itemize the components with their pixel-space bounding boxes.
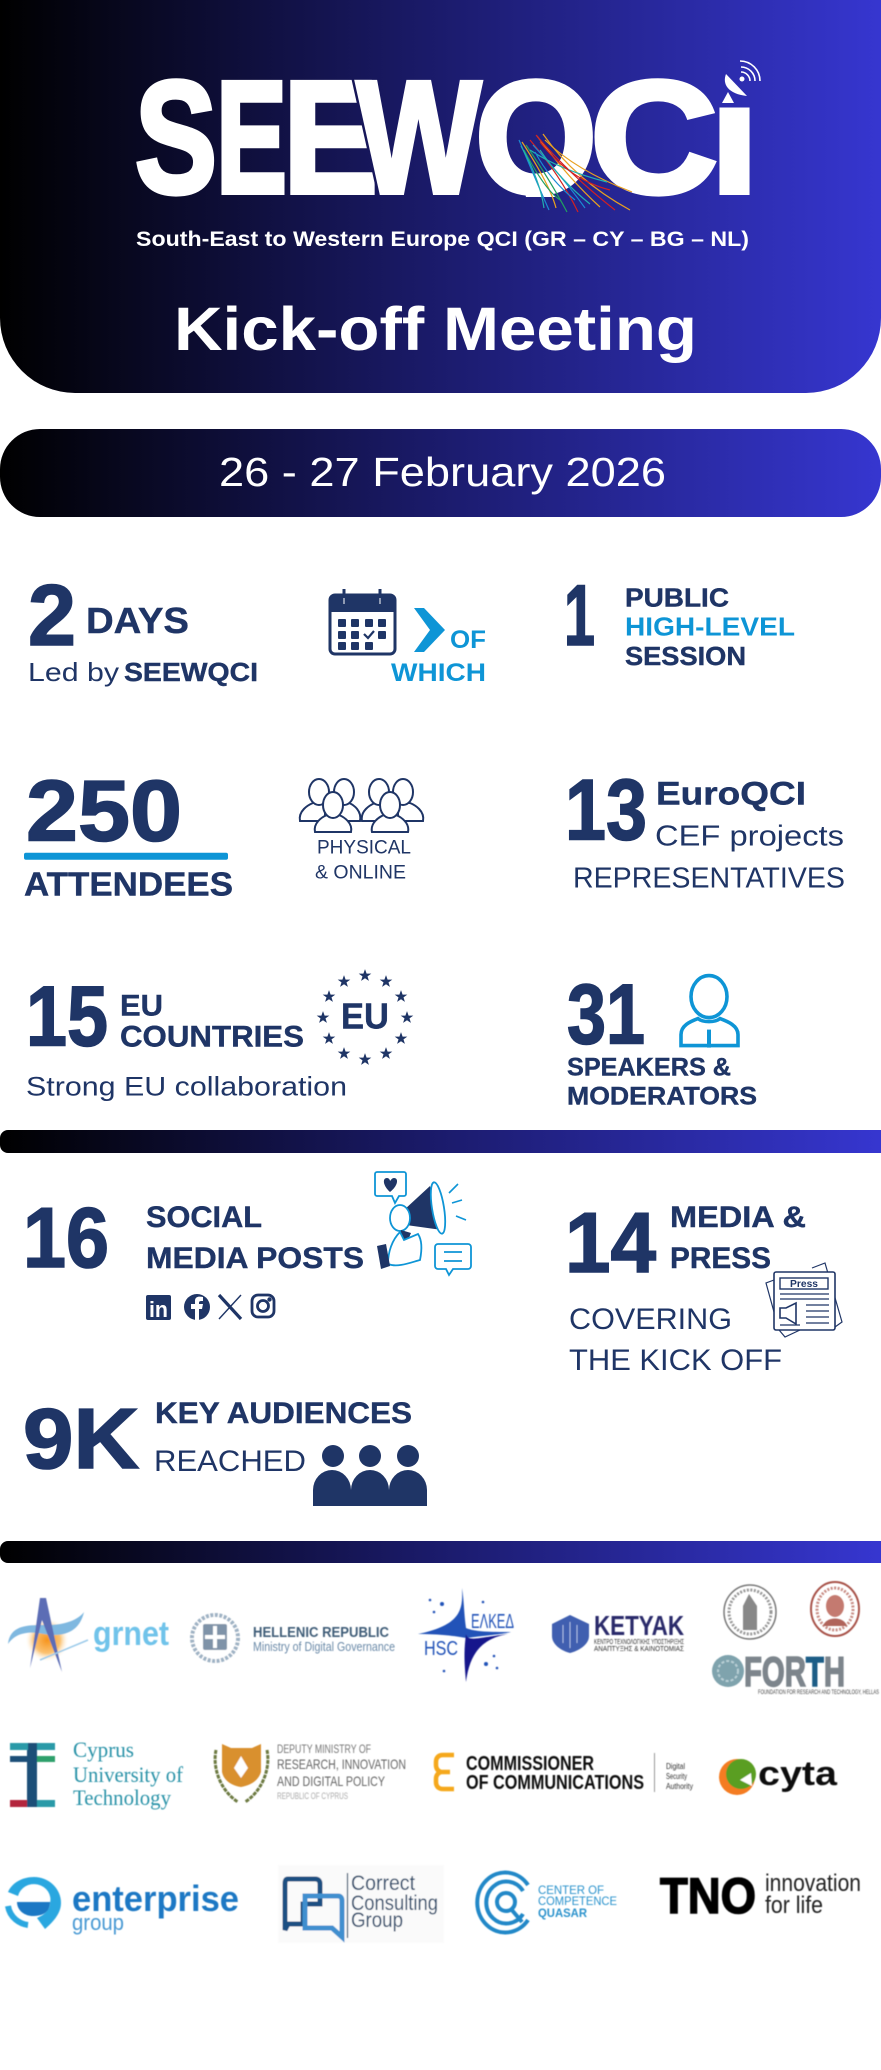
logo: Hellenic Republic: Ministry of Digital Governance <box>253 1639 395 1654</box>
logo: TNO: for life <box>765 1892 823 1919</box>
icon: press newspaper: Press <box>790 1279 818 1290</box>
logo: TNO <box>660 1868 861 1924</box>
icon: linkedin: in <box>149 1297 168 1322</box>
icon: calendar <box>330 589 395 654</box>
logo: enterprise group: group <box>72 1910 124 1935</box>
logo: Hellenic Republic <box>192 1615 395 1661</box>
logo: Cyprus University of Technology <box>10 1737 184 1810</box>
SEEWQCI logo: I <box>712 84 757 218</box>
stat: 15 EU countries: Strong EU collaboration <box>26 1072 347 1102</box>
stat: 2 days: 2 <box>28 568 76 664</box>
icon: speaker <box>681 976 738 1048</box>
logo: Deputy Ministry Cyprus: REPUBLIC OF CYPRUS <box>277 1791 348 1801</box>
logo: Cyprus University of Technology: University of <box>73 1762 184 1787</box>
logo: Cyprus University of Technology: Technology <box>73 1785 171 1810</box>
label: of which <box>391 626 486 687</box>
stat: 16 social media posts: SOCIAL <box>146 1201 262 1234</box>
stat: 1 public session: 1 <box>564 568 595 664</box>
logo: grnet: grnet <box>93 1615 169 1653</box>
stat: 13 EuroQCI: REPRESENTATIVES <box>573 863 845 895</box>
logo: Commissioner of Communications: Authority <box>666 1782 693 1791</box>
stat: 1 public session: PUBLIC <box>625 582 729 612</box>
stat: 31 speakers: 31 <box>567 968 645 1062</box>
icon: group of people <box>300 779 423 832</box>
logo: ELKED HSC: ΕΛΚΕΔ <box>471 1611 514 1633</box>
stat: 14 media and press: THE KICK OFF <box>569 1344 782 1377</box>
logo: Quasar <box>477 1872 617 1933</box>
stat: 14 media and press: PRESS <box>670 1242 771 1275</box>
date banner: 26 - 27 February 2026 <box>219 449 666 495</box>
title: Kick-off Meeting <box>174 295 697 363</box>
label: physical and online: PHYSICAL <box>317 838 411 858</box>
stat: 250 attendees <box>24 764 233 903</box>
icon: solid audience <box>313 1445 427 1506</box>
icon: megaphone with hand <box>375 1172 471 1275</box>
logo: Commissioner of Communications: OF COMMUNICATIONS <box>466 1772 644 1794</box>
logo: ELKED HSC: HSC <box>424 1638 458 1660</box>
stat: 31 speakers: MODERATORS <box>567 1082 757 1110</box>
icon: EU stars <box>317 969 413 1065</box>
stat: 9K key audiences: KEY AUDIENCES <box>155 1397 412 1430</box>
logo: Cyprus University of Technology: Cyprus <box>73 1737 134 1762</box>
label: of which: OF <box>450 626 486 654</box>
stat: 16 social media posts: MEDIA POSTS <box>146 1242 364 1275</box>
icon: instagram <box>252 1295 274 1317</box>
logo: enterprise group <box>8 1877 239 1935</box>
stat: 1 public session: HIGH-LEVEL <box>625 612 795 642</box>
logo: Deputy Ministry Cyprus: AND DIGITAL POLICY <box>277 1773 385 1789</box>
logo: university seal grey <box>724 1585 776 1639</box>
logo: enterprise group: enterprise <box>72 1878 239 1919</box>
label: physical and online <box>315 838 411 884</box>
date banner <box>0 429 881 517</box>
logo: Correct Consulting Group: Consulting <box>351 1892 438 1915</box>
stat: 15 EU countries: COUNTRIES <box>120 1020 304 1054</box>
logo: Correct Consulting Group <box>278 1865 444 1943</box>
SEEWQCI logo: Q <box>475 48 597 226</box>
stat: 14 media and press: MEDIA & <box>670 1201 806 1234</box>
logo: Correct Consulting Group: Group <box>351 1909 403 1932</box>
logo: Quasar: QUASAR <box>538 1906 587 1920</box>
stat: 15 EU countries <box>26 970 347 1102</box>
stat: 250 attendees: ATTENDEES <box>24 866 233 903</box>
stat: 2 days: Led by <box>28 657 119 687</box>
stat: 15 EU countries: EU <box>120 990 163 1022</box>
stat: 31 speakers: SPEAKERS & <box>567 1054 731 1082</box>
logo: cyta <box>719 1755 838 1795</box>
logo: ELKED HSC <box>418 1588 514 1682</box>
stat: 2 days <box>28 568 258 687</box>
logo: KETYAK: ΑΝΑΠΤΥΞΗΣ & ΚΑΙΝΟΤΟΜΙΑΣ <box>594 1646 685 1653</box>
icons: social networks <box>146 1294 274 1322</box>
logo: Commissioner of Communications: Digital <box>666 1762 685 1771</box>
logo: KETYAK: KETYAK <box>594 1610 684 1641</box>
stat: 1 public session: SESSION <box>625 641 746 671</box>
logo: Deputy Ministry Cyprus <box>215 1742 406 1802</box>
logo: grnet <box>8 1598 169 1672</box>
stat: 2 days: DAYS <box>86 600 189 641</box>
stat: 250 attendees: 250 <box>26 764 182 860</box>
logo: KETYAK <box>552 1610 685 1653</box>
logo: Deputy Ministry Cyprus: DEPUTY MINISTRY OF <box>277 1742 371 1756</box>
stat: 14 media and press: 14 <box>565 1196 656 1291</box>
stat: 14 media and press <box>565 1196 806 1377</box>
stat: 13 EuroQCI: CEF projects <box>655 821 844 853</box>
logo: TNO: innovation <box>765 1870 861 1897</box>
logo: Commissioner of Communications: COMMISSIONER <box>466 1753 594 1775</box>
SEEWQCI logo: E <box>216 48 287 226</box>
logo: university seal red <box>811 1582 859 1636</box>
SEEWQCI logo: C <box>590 48 718 226</box>
logo tagline: South-East to Western Europe QCI (GR – CY – BG – NL) <box>136 228 749 251</box>
stat: 2 days: SEEWQCI <box>124 657 258 687</box>
logo: Deputy Ministry Cyprus: RESEARCH, INNOVATION <box>277 1756 406 1772</box>
logo: Quasar: CENTER OF <box>538 1883 604 1897</box>
SEEWQCI logo <box>135 48 760 233</box>
stat: 13 EuroQCI: 13 <box>565 763 647 859</box>
logo: Commissioner of Communications <box>436 1753 693 1794</box>
logo: Hellenic Republic: HELLENIC REPUBLIC <box>253 1625 389 1641</box>
icon: X <box>219 1295 241 1319</box>
logo: cyta: cyta <box>758 1755 838 1793</box>
divider bar 2 <box>0 1541 881 1563</box>
SEEWQCI logo: E <box>283 48 378 226</box>
label: of which: WHICH <box>391 659 486 687</box>
SEEWQCI logo: W <box>356 48 481 226</box>
logo: KETYAK: ΚΕΝΤΡΟ ΤΕΧΝΟΛΟΓΙΚΗΣ ΥΠΟΣΤΗΡΙΞΗΣ <box>594 1639 684 1646</box>
logo: FORTH: FORTH <box>744 1648 845 1695</box>
icon: EU stars: EU <box>341 996 389 1037</box>
stat: 9K key audiences <box>23 1392 412 1487</box>
stat: 1 public session <box>564 568 795 671</box>
logo: Commissioner of Communications: Security <box>666 1772 687 1781</box>
stat: 15 EU countries: 15 <box>26 970 108 1064</box>
label: physical and online: & ONLINE <box>315 862 406 884</box>
logo: TNO: TNO <box>660 1868 756 1924</box>
stat: 16 social media posts <box>23 1191 364 1286</box>
divider bar 1 <box>0 1130 881 1153</box>
satellite dish <box>722 61 760 103</box>
stat: 13 EuroQCI <box>565 763 845 895</box>
partner logos <box>8 1582 879 1943</box>
icon: press newspaper <box>766 1263 842 1337</box>
stat: 31 speakers <box>567 968 757 1110</box>
logo: Correct Consulting Group: Correct <box>351 1872 415 1895</box>
header panel <box>0 0 881 393</box>
icon: chevron <box>414 608 445 652</box>
logo: FORTH <box>712 1648 879 1696</box>
stat: 9K key audiences: REACHED <box>154 1445 306 1478</box>
icon: facebook <box>184 1294 210 1320</box>
logo: Quasar: COMPETENCE <box>538 1894 617 1908</box>
stat: 9K key audiences: 9K <box>23 1392 139 1487</box>
stat: 16 social media posts: 16 <box>23 1191 109 1286</box>
SEEWQCI logo: S <box>135 48 217 226</box>
quantum fibres <box>519 134 632 212</box>
stat: 14 media and press: COVERING <box>569 1303 732 1336</box>
stat: 13 EuroQCI: EuroQCI <box>656 776 806 812</box>
